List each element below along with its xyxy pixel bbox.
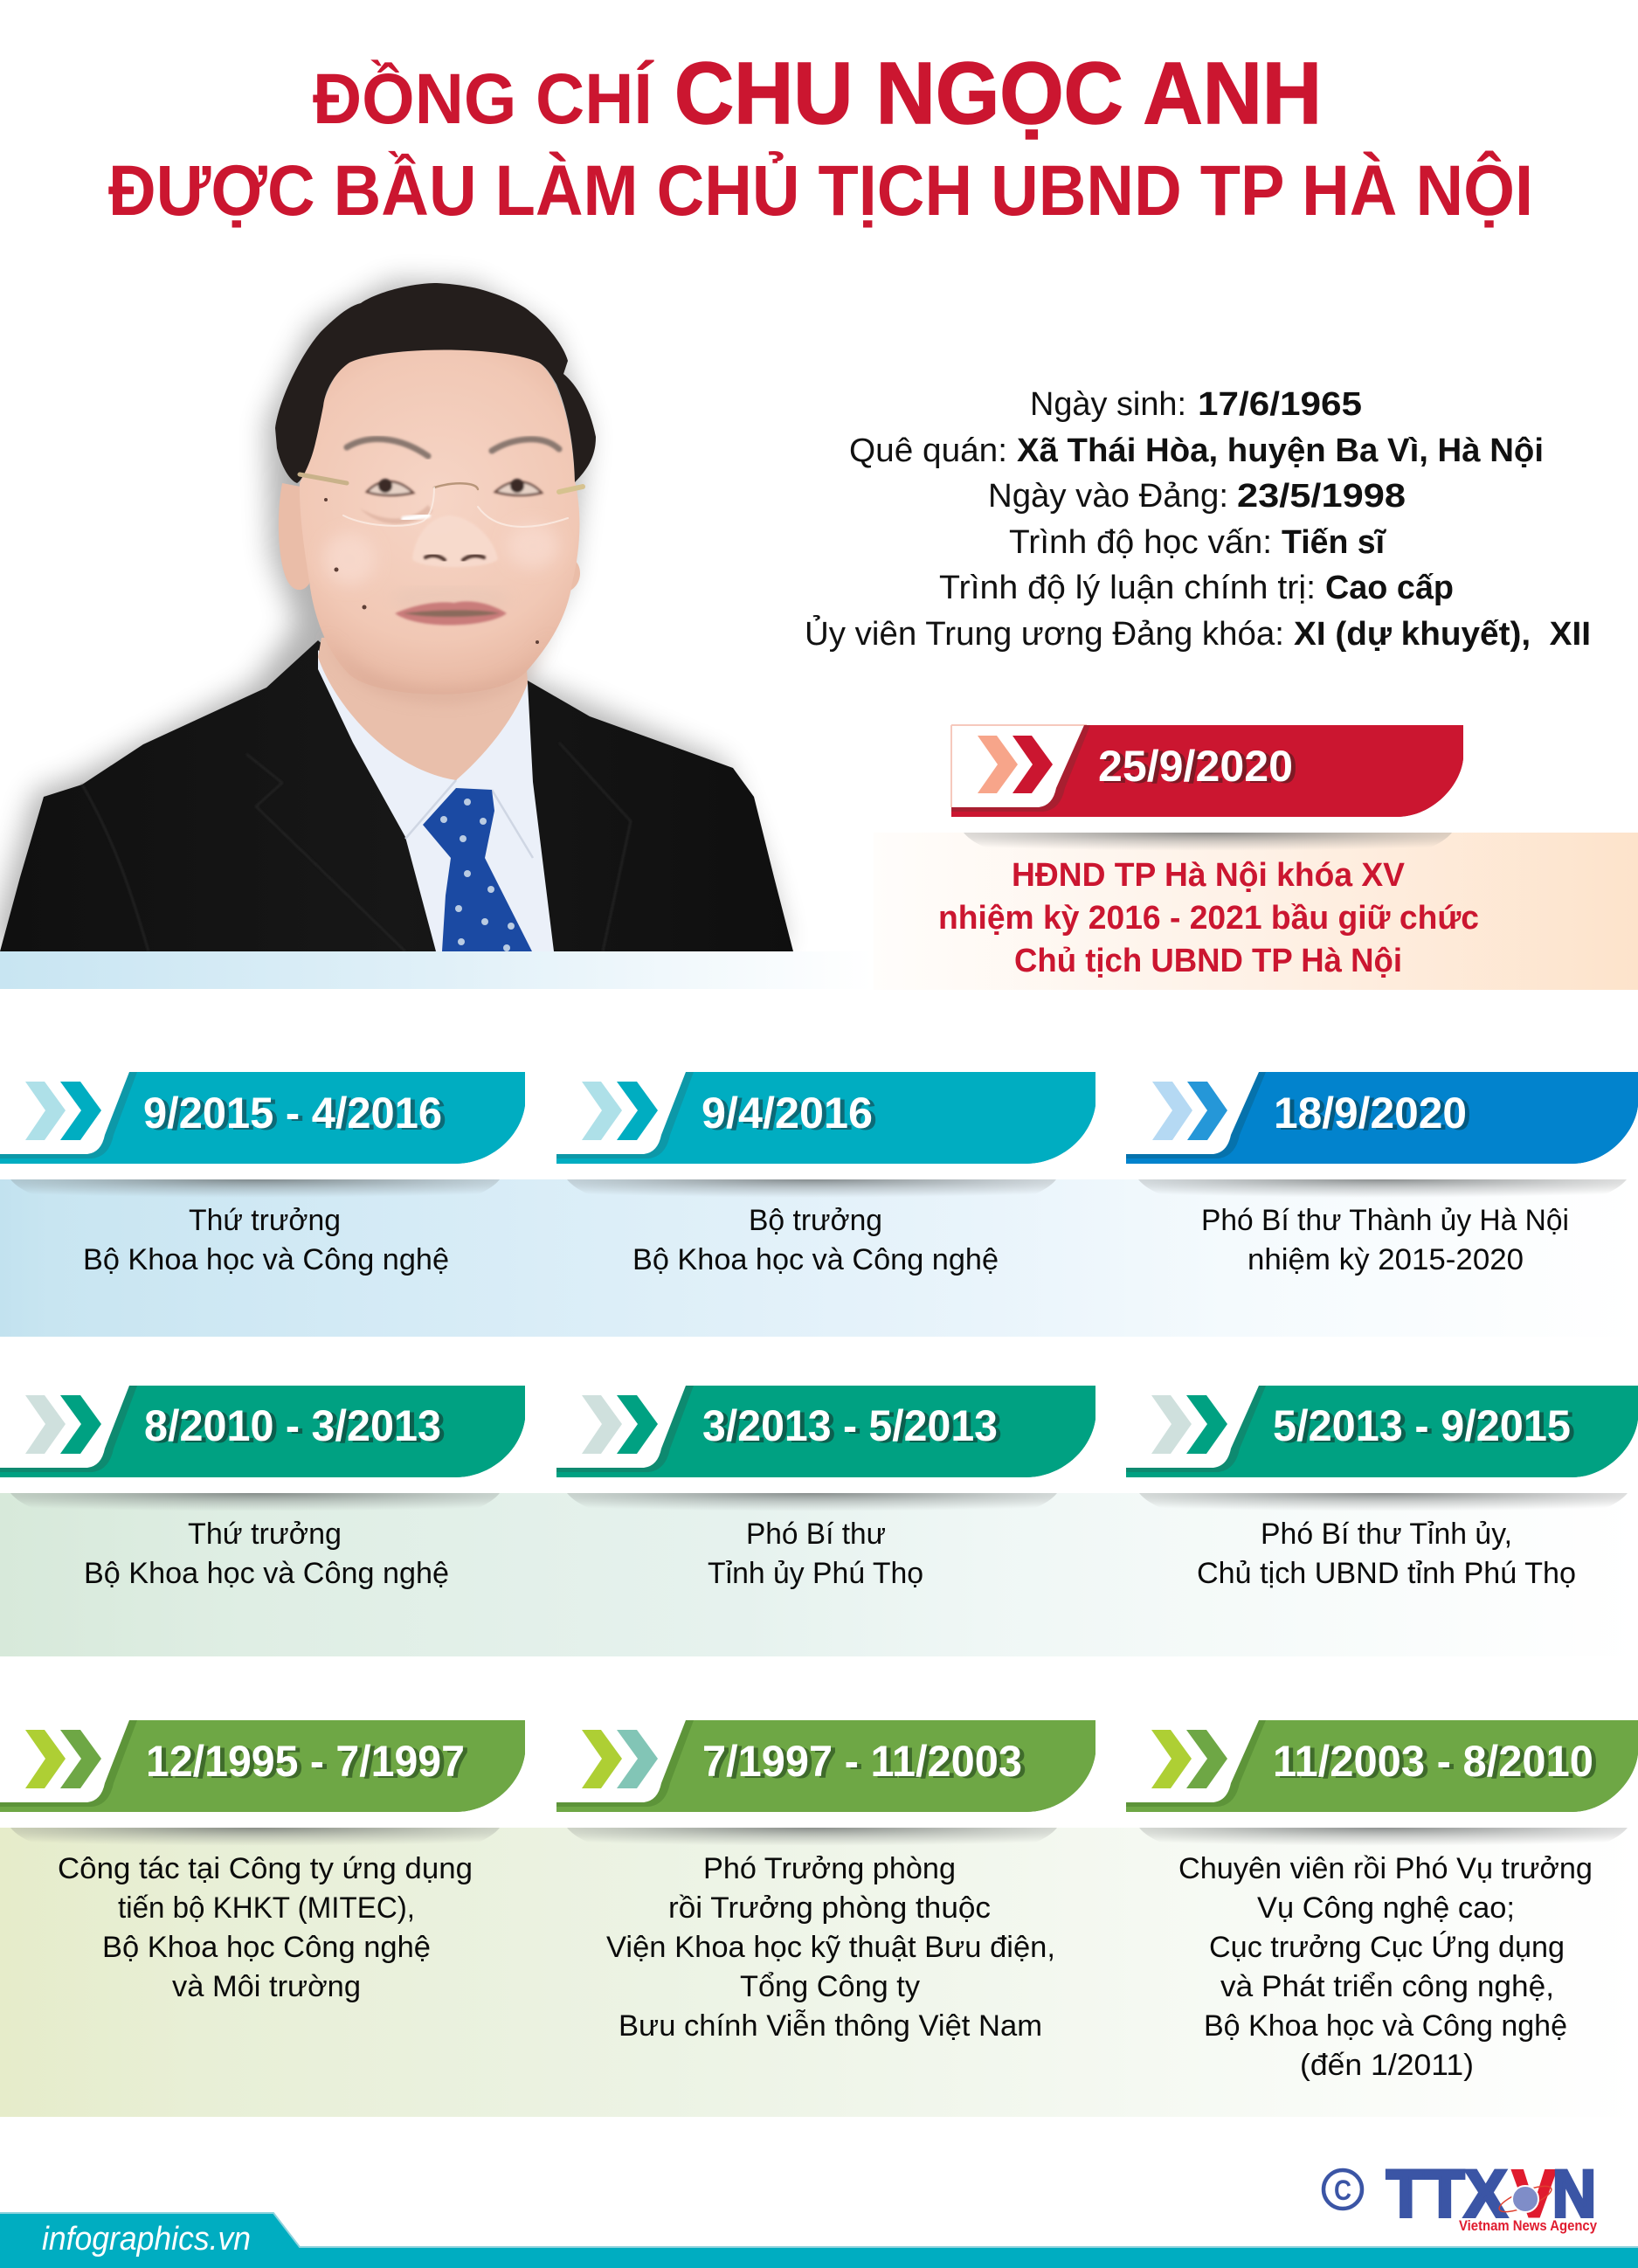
- date banner: 18/9/2020: [1126, 1072, 1638, 1164]
- title: ĐỒNG CHÍ: [313, 59, 654, 139]
- panel text: 9/4/2016: [567, 1179, 1056, 1276]
- panel text: 8/2010 - 3/2013: [10, 1493, 500, 1590]
- panel text: 12/1995 - 7/1997: và Môi trường: [172, 1970, 361, 2003]
- panel text: 11/2003 - 8/2010: (đến 1/2011): [1300, 2049, 1474, 2082]
- panel text: 11/2003 - 8/2010: Cục trưởng Cục Ứng dụng: [1209, 1931, 1565, 1964]
- date banner: 5/2013 - 9/2015: 5/2013 - 9/2015: [1273, 1401, 1571, 1450]
- panel row 3 background: [0, 1828, 1638, 2117]
- panel text: 7/1997 - 11/2003: Phó Trưởng phòng: [703, 1852, 956, 1885]
- title: [108, 45, 1533, 231]
- logo: TTXVN: [1324, 2157, 1597, 2234]
- panel text: 3/2013 - 5/2013: [567, 1493, 1057, 1590]
- panel text: 11/2003 - 8/2010: Chuyên viên rồi Phó Vụ trưởng: [1178, 1852, 1593, 1885]
- date banner: 25/9/2020: [951, 725, 1463, 817]
- tie: [423, 788, 532, 951]
- portrait photo: [0, 281, 793, 951]
- icon: globe with orbit: [1496, 2182, 1554, 2216]
- glasses: [300, 474, 583, 527]
- biography: Quê quán:: [849, 432, 1007, 469]
- panel: 25/9/2020 description: HĐND TP Hà Nội khóa XV: [1012, 857, 1406, 894]
- band under portrait: [0, 951, 874, 989]
- biography: Trình độ lý luận chính trị:: [939, 570, 1316, 606]
- panel text: 18/9/2020: [1138, 1179, 1627, 1276]
- ears: [279, 483, 580, 592]
- footer band with site name: [0, 2213, 1638, 2268]
- footer band with site name: infographics.vn: [42, 2221, 251, 2258]
- biography: Ngày vào Đảng:: [988, 478, 1228, 515]
- panel text: 5/2013 - 9/2015: Phó Bí thư Tỉnh ủy,: [1261, 1518, 1512, 1551]
- icon: copyright mark: C: [1334, 2175, 1351, 2206]
- panel text: 9/4/2016: Bộ Khoa học và Công nghệ: [632, 1243, 999, 1276]
- logo: TTXVN: TTX: [1386, 2157, 1507, 2231]
- jaw shadow: [325, 631, 552, 701]
- panel text: 9/4/2016: Bộ trưởng: [749, 1204, 882, 1237]
- biography: Tiến sĩ: [1282, 524, 1386, 561]
- shirt: [318, 650, 554, 951]
- panel text: 18/9/2020: Phó Bí thư Thành ủy Hà Nội: [1201, 1204, 1569, 1237]
- biography: Ngày sinh:: [1030, 386, 1186, 423]
- title: ĐƯỢC BẦU LÀM CHỦ TỊCH UBND TP HÀ NỘI: [108, 151, 1533, 231]
- date banner: 3/2013 - 5/2013: 3/2013 - 5/2013: [702, 1401, 998, 1450]
- icon: copyright mark: [1324, 2170, 1362, 2209]
- panel: 25/9/2020 description: [874, 833, 1638, 990]
- panel text: 9/2015 - 4/2016: [10, 1179, 500, 1276]
- biography: 23/5/1998: [1237, 478, 1406, 515]
- panel text: 5/2013 - 9/2015: Chủ tịch UBND tỉnh Phú Thọ: [1197, 1557, 1576, 1590]
- nose: [412, 515, 498, 567]
- panel text: 8/2010 - 3/2013: Thứ trưởng: [188, 1518, 342, 1551]
- date banner: 9/2015 - 4/2016: 9/2015 - 4/2016: [143, 1089, 442, 1137]
- panel text: 11/2003 - 8/2010: Bộ Khoa học và Công nghệ: [1204, 2009, 1567, 2043]
- eye bags: [360, 505, 432, 524]
- date banner: 12/1995 - 7/1997: 12/1995 - 7/1997: [146, 1737, 465, 1786]
- suit jacket: [0, 640, 793, 951]
- logo: TTXVN: N: [1552, 2157, 1596, 2231]
- panel text: 8/2010 - 3/2013: Bộ Khoa học và Công nghệ: [84, 1557, 449, 1590]
- date banner: 9/4/2016: [556, 1072, 1095, 1164]
- date banner: 11/2003 - 8/2010: 11/2003 - 8/2010: [1273, 1737, 1593, 1786]
- panel text: 3/2013 - 5/2013: Tỉnh ủy Phú Thọ: [708, 1557, 923, 1590]
- date banner: 25/9/2020: 25/9/2020: [1098, 742, 1293, 791]
- date banner: 7/1997 - 11/2003: [556, 1720, 1095, 1812]
- panel text: 5/2013 - 9/2015: [1139, 1493, 1628, 1590]
- biography: [805, 386, 1591, 653]
- shirt collar folds: [405, 780, 533, 858]
- panel row 1 background: [0, 1179, 1638, 1337]
- biography: Cao cấp: [1325, 570, 1454, 606]
- panel text: 7/1997 - 11/2003: [567, 1828, 1057, 2043]
- biography: Ủy viên Trung ương Đảng khóa:: [805, 614, 1284, 653]
- tie dots: [440, 799, 515, 951]
- date banner: 8/2010 - 3/2013: 8/2010 - 3/2013: [144, 1401, 441, 1450]
- face: [300, 349, 579, 695]
- panel row 2 background: [0, 1493, 1638, 1656]
- panel: 25/9/2020 description: Chủ tịch UBND TP Hà Nội: [1014, 943, 1402, 979]
- eyes: [367, 479, 542, 495]
- panel text: 7/1997 - 11/2003: Bưu chính Viễn thông Việt Nam: [619, 2009, 1042, 2043]
- panel text: 9/2015 - 4/2016: Bộ Khoa học và Công nghệ: [83, 1243, 449, 1276]
- date banner: 3/2013 - 5/2013: [556, 1386, 1095, 1477]
- moles: [324, 498, 539, 644]
- panel text: 11/2003 - 8/2010: [1139, 1828, 1628, 2082]
- hair: [275, 283, 596, 483]
- moustache shade: [391, 590, 512, 605]
- panel text: 7/1997 - 11/2003: Tổng Công ty: [740, 1970, 920, 2003]
- date banner: 7/1997 - 11/2003: 7/1997 - 11/2003: [702, 1737, 1022, 1786]
- panel text: 3/2013 - 5/2013: Phó Bí thư: [746, 1518, 886, 1551]
- jacket lapel shading: [82, 743, 631, 951]
- mouth: [395, 601, 507, 626]
- date banner: 8/2010 - 3/2013: [0, 1386, 525, 1477]
- biography: Xã Thái Hòa, huyện Ba Vì, Hà Nội: [1017, 432, 1544, 469]
- title: CHU NGỌC ANH: [674, 45, 1322, 142]
- panel text: 7/1997 - 11/2003: Viện Khoa học kỹ thuật Bưu điện,: [606, 1931, 1055, 1964]
- panel text: 9/2015 - 4/2016: Thứ trưởng: [189, 1204, 341, 1237]
- panel text: 12/1995 - 7/1997: Bộ Khoa học Công nghệ: [102, 1931, 431, 1964]
- panel text: 18/9/2020: nhiệm kỳ 2015-2020: [1248, 1243, 1524, 1276]
- panel text: 11/2003 - 8/2010: Vụ Công nghệ cao;: [1257, 1891, 1515, 1925]
- biography: XI (dự khuyết), XII: [1294, 616, 1591, 653]
- panel text: 7/1997 - 11/2003: rồi Trưởng phòng thuộc: [668, 1891, 991, 1925]
- date banner: 18/9/2020: 18/9/2020: [1274, 1089, 1467, 1137]
- panel text: 11/2003 - 8/2010: và Phát triển công nghệ,: [1220, 1970, 1554, 2003]
- date banner: 9/4/2016: 9/4/2016: [702, 1089, 873, 1137]
- cheek highlights: [323, 523, 559, 585]
- logo: TTXVN: Vietnam News Agency: [1459, 2217, 1597, 2234]
- eyebrows: [347, 439, 559, 456]
- panel text: 12/1995 - 7/1997: tiến bộ KHKT (MITEC),: [118, 1891, 415, 1925]
- date banner: 11/2003 - 8/2010: [1126, 1720, 1638, 1812]
- date banner: 12/1995 - 7/1997: [0, 1720, 525, 1812]
- date banner: 9/2015 - 4/2016: [0, 1072, 525, 1164]
- panel text: 12/1995 - 7/1997: [10, 1828, 500, 2003]
- biography: 17/6/1965: [1198, 386, 1362, 423]
- panel text: 12/1995 - 7/1997: Công tác tại Công ty ứng dụng: [58, 1852, 473, 1885]
- date banner: 5/2013 - 9/2015: [1126, 1386, 1638, 1477]
- biography: Trình độ học vấn:: [1009, 524, 1272, 561]
- neck: [318, 629, 528, 780]
- panel: 25/9/2020 description: nhiệm kỳ 2016 - 2021 bầu giữ chức: [938, 900, 1479, 937]
- logo: TTXVN: V: [1512, 2157, 1556, 2231]
